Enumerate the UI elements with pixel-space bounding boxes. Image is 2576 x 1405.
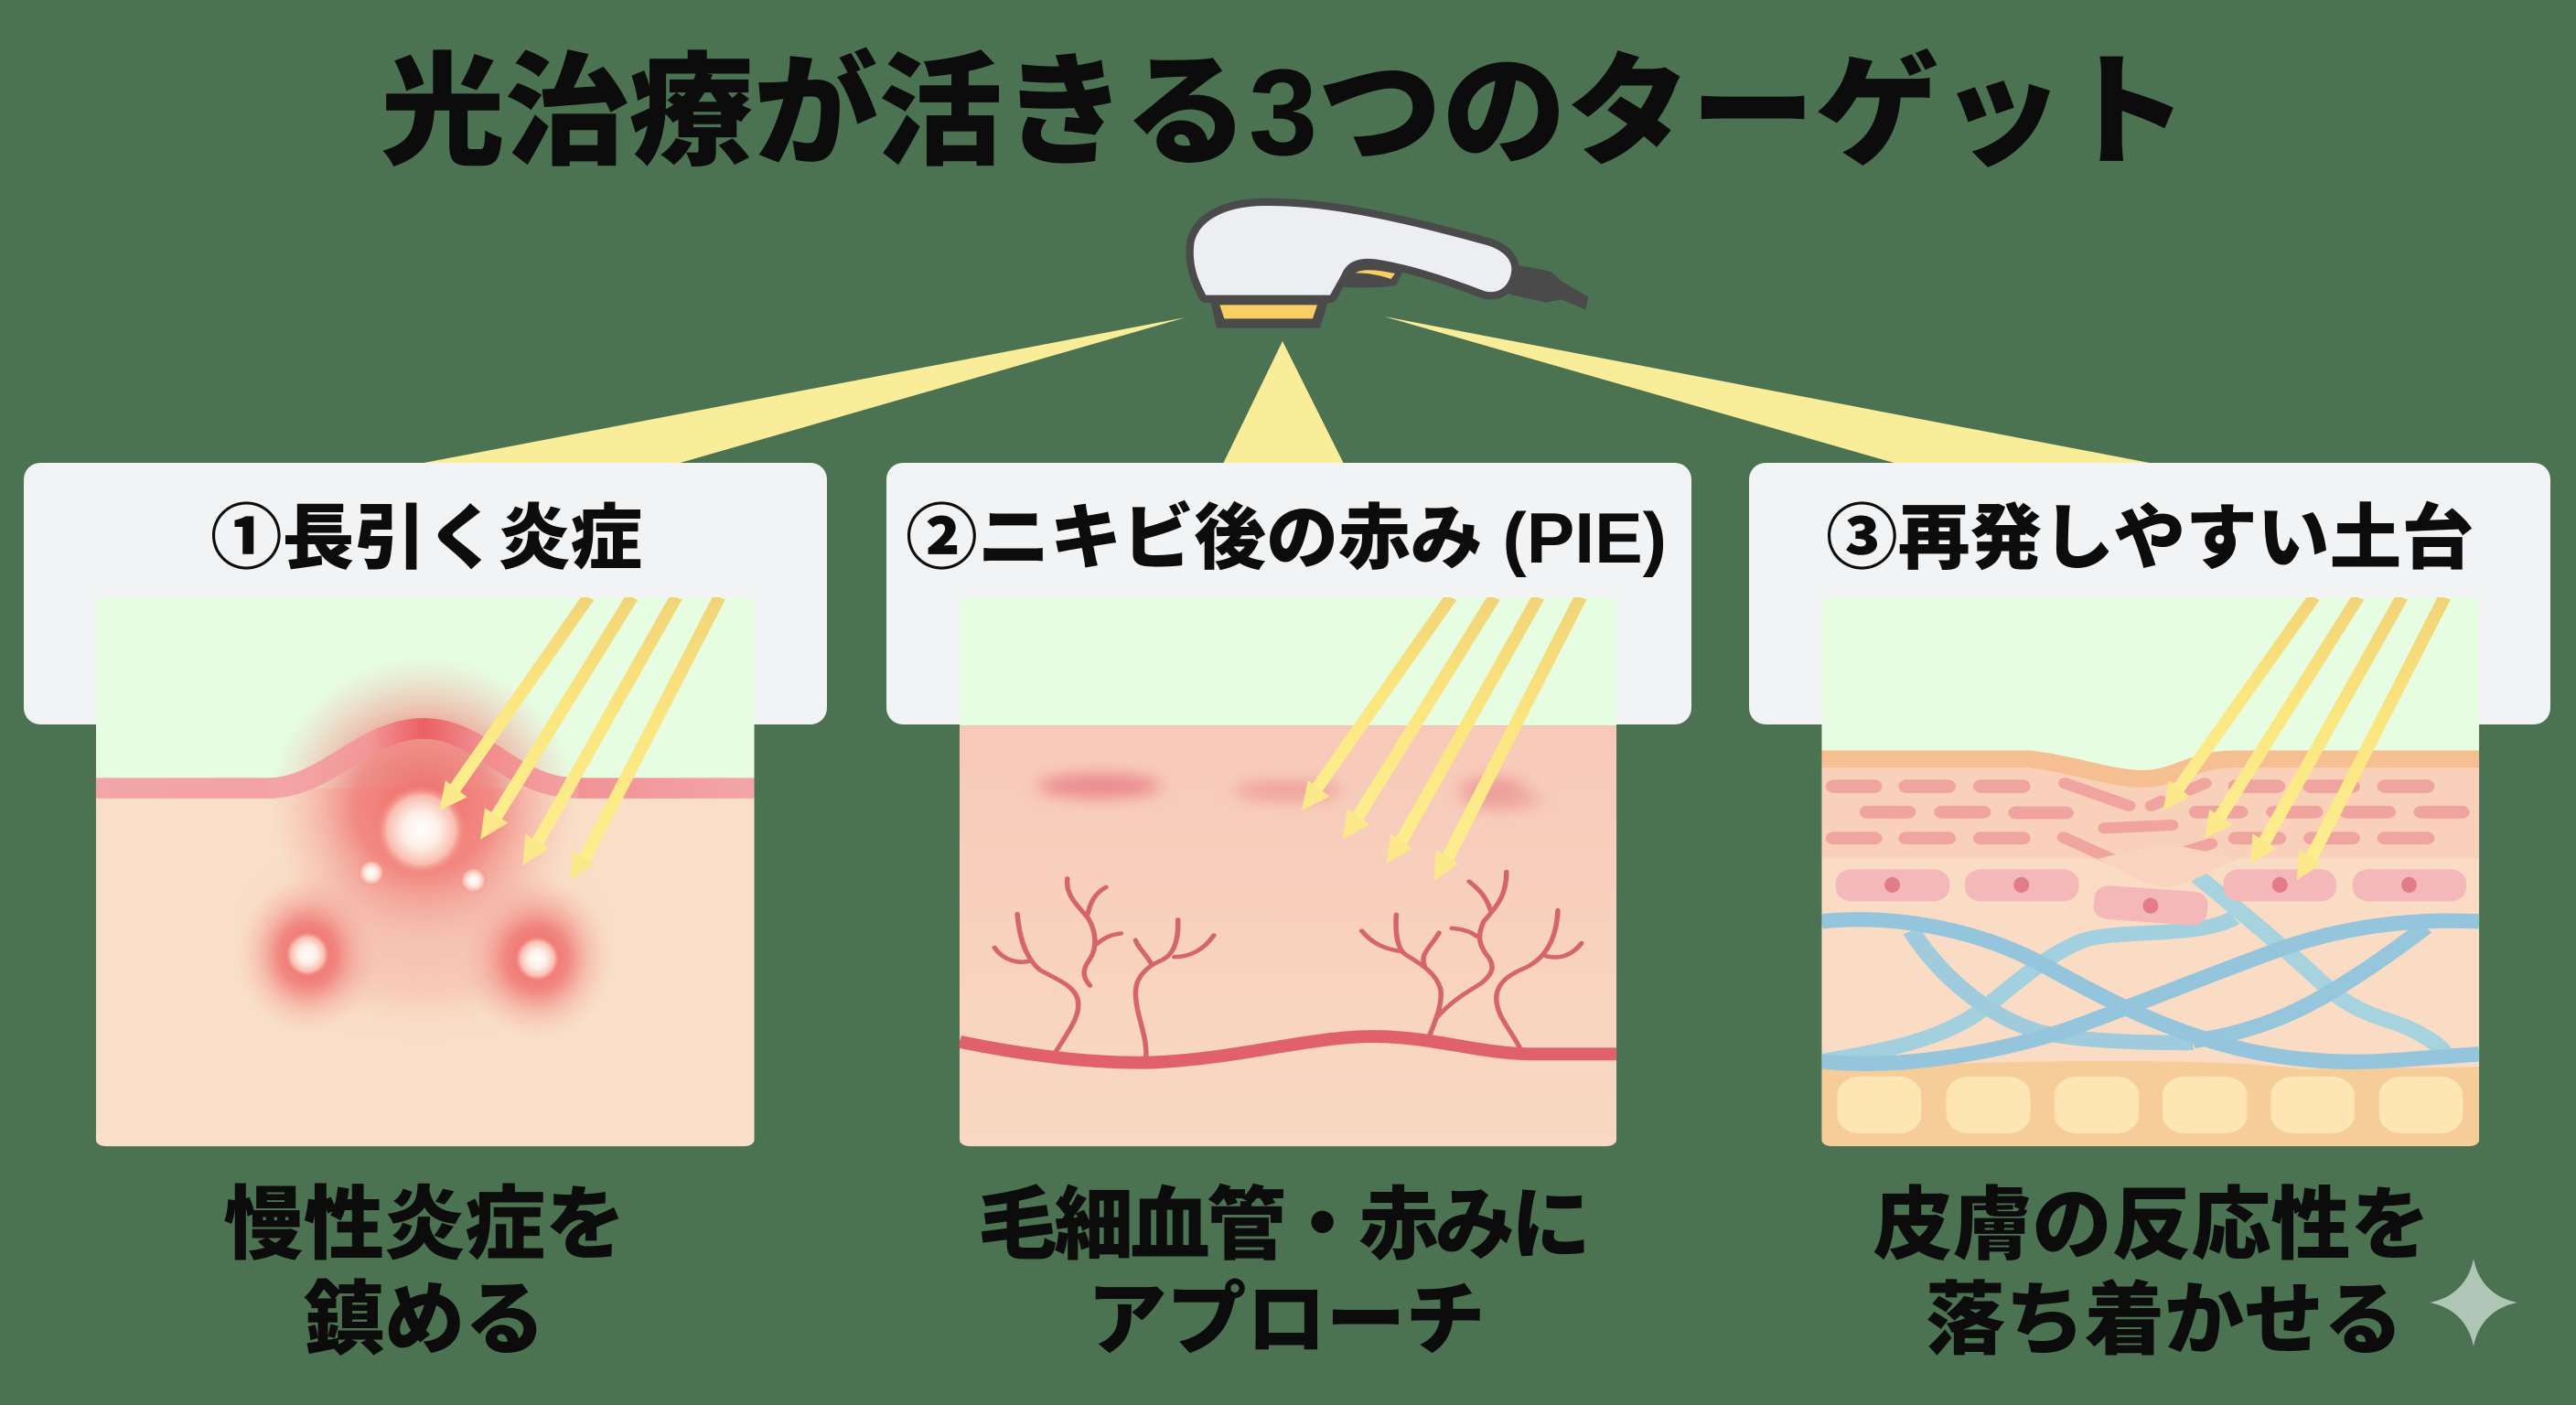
caption 1: 鎮める: [304, 1274, 545, 1365]
light arrows 2: [1302, 597, 1581, 882]
fat layer: [1821, 1061, 2479, 1146]
caption 2: アプローチ: [1087, 1276, 1486, 1365]
caption 3: 落ち着かせる: [1926, 1276, 2403, 1365]
caption 2: 毛細血管・赤みに: [978, 1181, 1591, 1270]
caption 3: 皮膚の反応性を: [1873, 1181, 2430, 1270]
panel: relapse-prone foundation: [1749, 463, 2550, 1365]
basal cells: [1836, 869, 2466, 927]
caption 1: 慢性炎症を: [223, 1179, 626, 1270]
icon: handheld light therapy device: [1194, 206, 1589, 327]
icon: sparkle watermark: [2430, 1259, 2517, 1346]
panel: post-acne redness (PIE): [886, 463, 1691, 1365]
keratin cells: [1826, 779, 2470, 844]
illustration: skin layers: [1821, 597, 2479, 1146]
heading 3: ③再発しやすい土台: [1826, 498, 2474, 578]
light arrows 1: [439, 597, 719, 880]
illustration: inflamed skin: [96, 597, 755, 1147]
light arrows 3: [2163, 597, 2444, 880]
capillaries: [994, 872, 1582, 1056]
card header 3: [1749, 463, 2550, 724]
collagen fibers: [1821, 876, 2479, 1064]
heading 1: ①長引く炎症: [210, 498, 642, 578]
panel: chronic inflammation: [24, 463, 827, 1365]
card header 1: [24, 463, 827, 724]
caption 2: [978, 1181, 1591, 1365]
title: 光治療が活きる3つのターゲット: [381, 45, 2188, 181]
illustration: capillaries and redness: [960, 597, 1616, 1147]
light beams from device to cards: [419, 316, 2154, 464]
card header 2: [886, 463, 1691, 724]
heading 2: ②ニキビ後の赤み (PIE): [906, 498, 1667, 578]
